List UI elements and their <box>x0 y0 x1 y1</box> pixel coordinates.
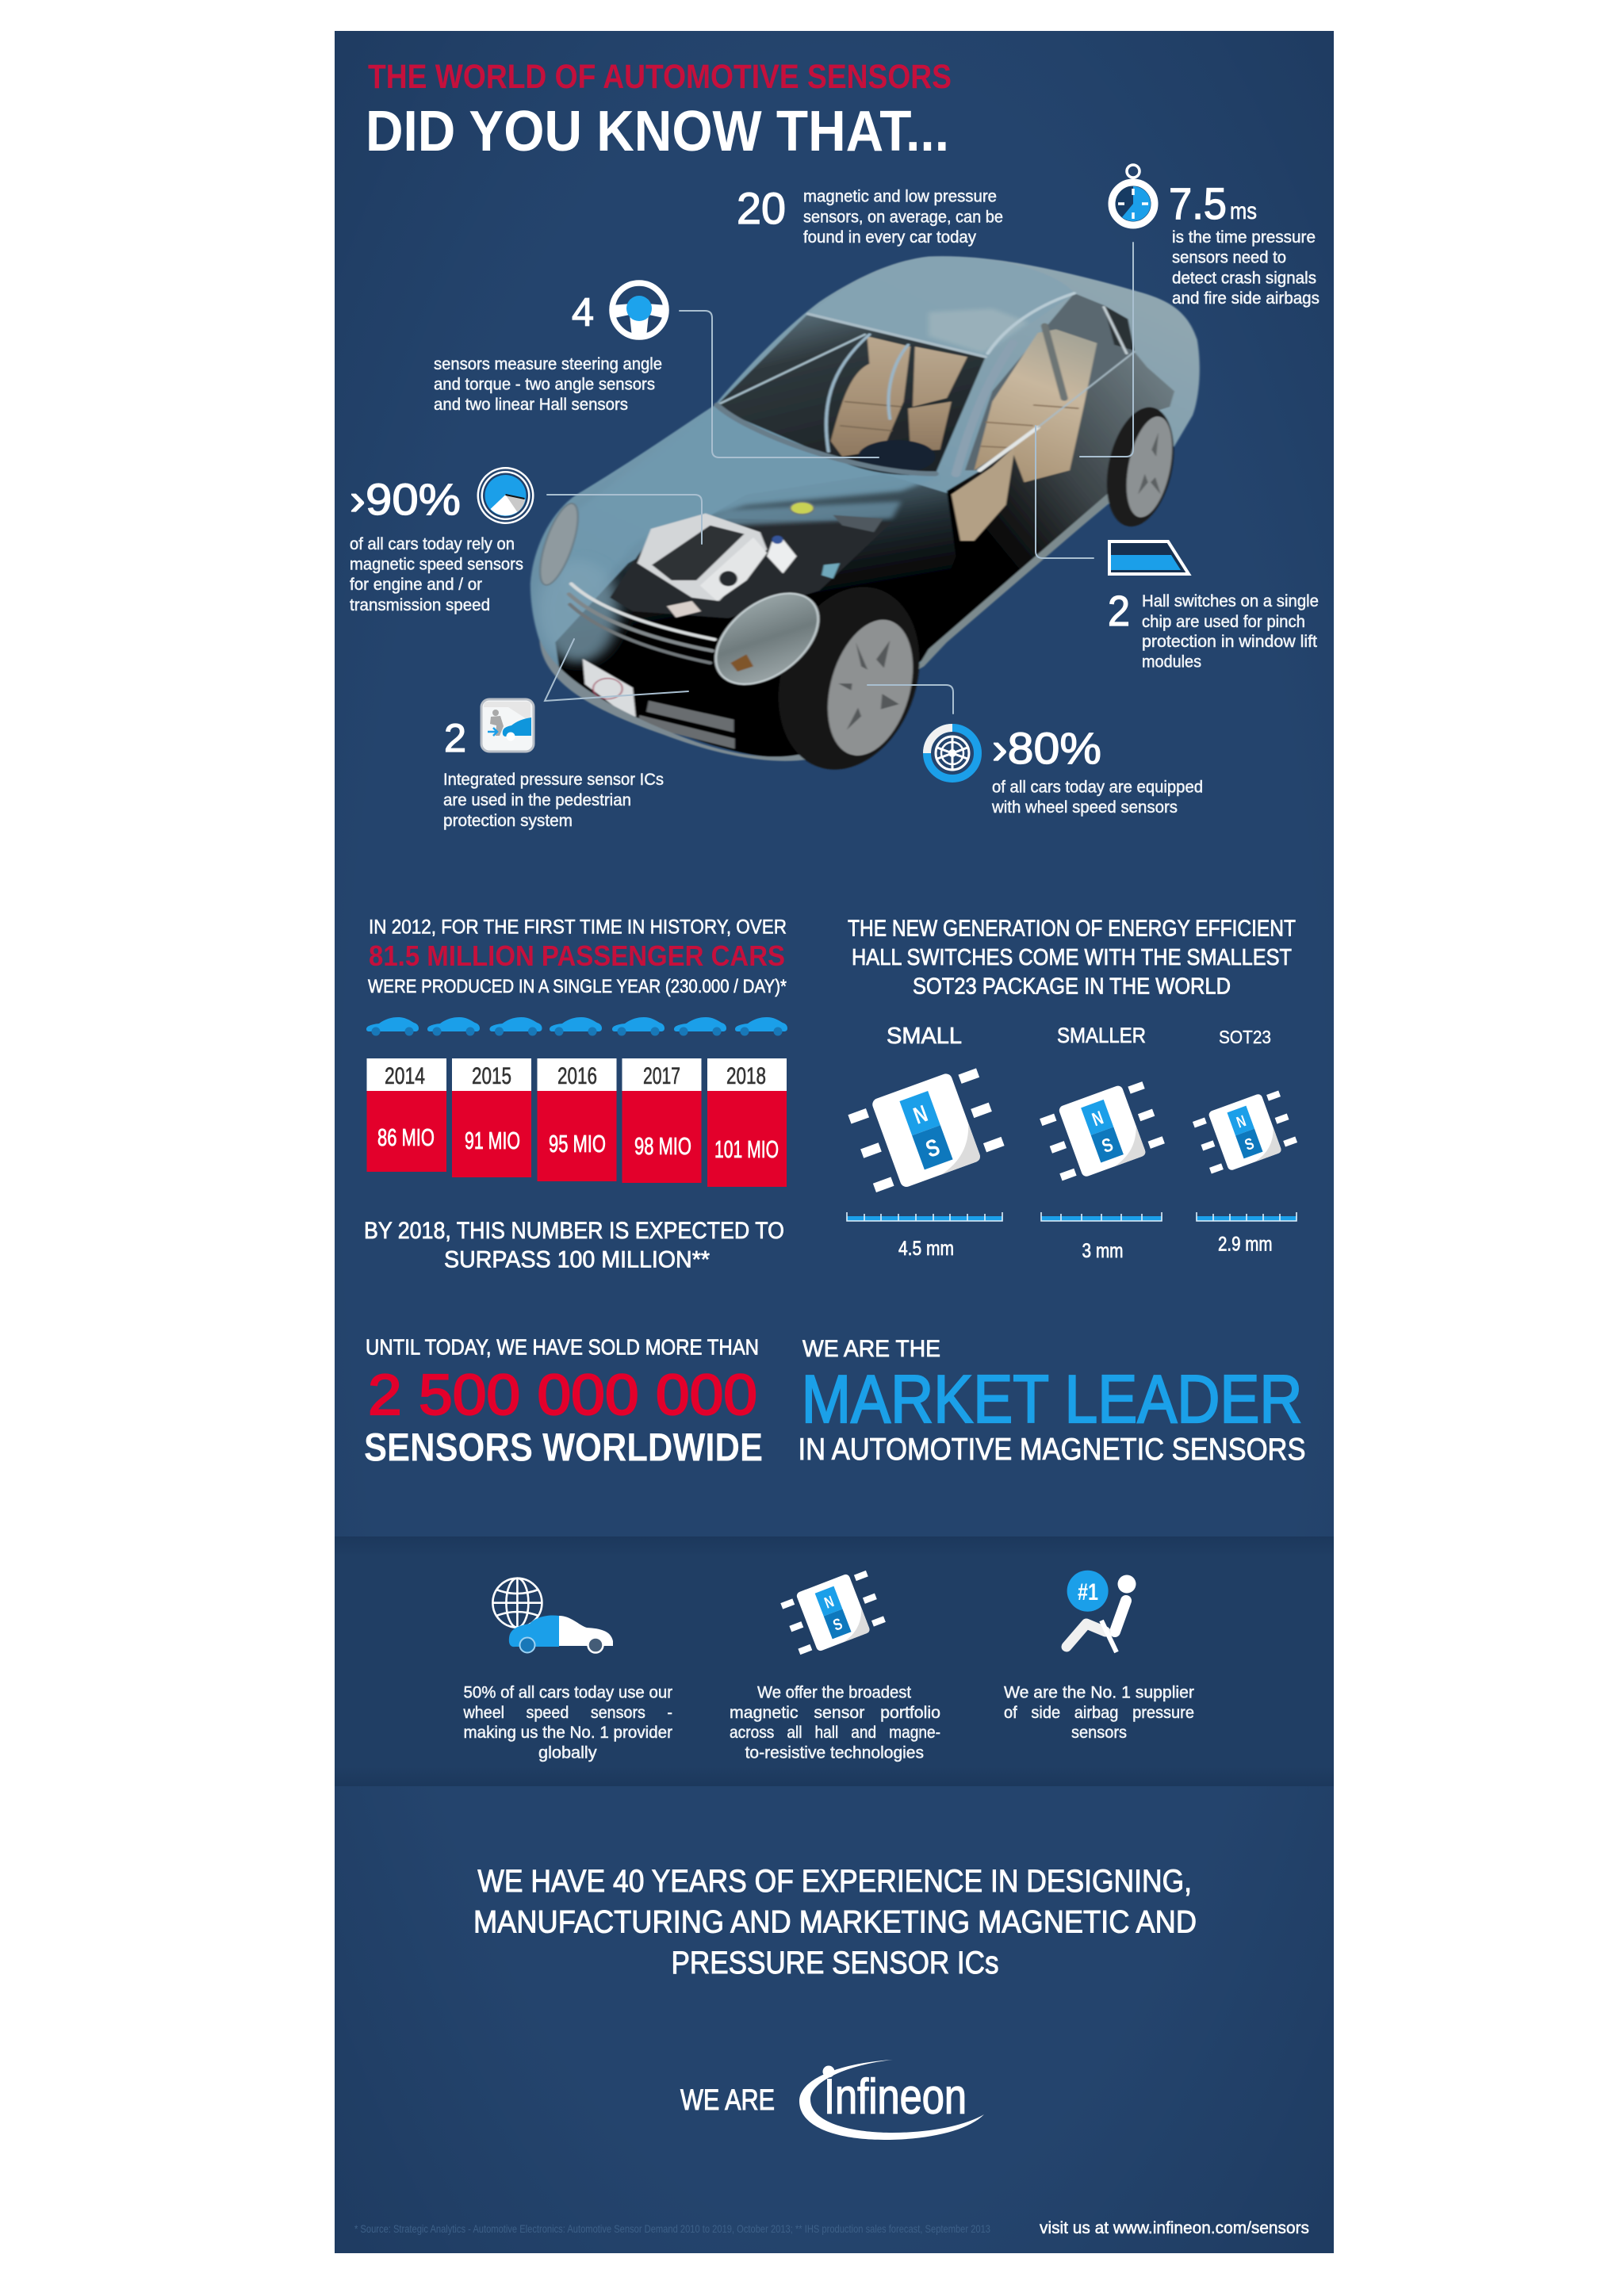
bar 2018: 2018 <box>726 1063 766 1089</box>
logo: Infineon: Infineon <box>824 2070 967 2125</box>
engine bay top haze <box>628 501 902 557</box>
production heading <box>368 916 787 997</box>
website link: visit us at www.infineon.com/sensors <box>1040 2218 1309 2237</box>
text: airbag supplier: of side airbag pressure <box>1004 1703 1194 1722</box>
size labels <box>887 1024 1271 1049</box>
engine block <box>638 513 767 601</box>
left headlight <box>532 501 586 587</box>
text: portfolio: We offer the broadest <box>757 1682 911 1701</box>
market leader statement: WE ARE THE <box>802 1336 940 1362</box>
icon: tire <box>927 728 978 779</box>
bumper left haze <box>537 560 619 663</box>
bar 2018: 101 MIO <box>714 1135 779 1163</box>
engine plate <box>652 526 745 580</box>
market leader statement <box>798 1336 1305 1467</box>
callout line: wheel speed <box>868 685 953 714</box>
fact: 4 steering sensors <box>434 290 662 414</box>
side interior <box>965 293 1134 470</box>
bar 2016 <box>538 1058 617 1181</box>
fact: 80 percent: of all cars today are equipped <box>992 778 1203 797</box>
footnote: * Source: Strategic Analytics - Automotive Electronics: Automotive Sensor Demand 2010 to 2019, October 2013; ** IHS production sales forecast, September 2013 <box>354 2222 990 2235</box>
text: airbag supplier <box>1004 1682 1194 1742</box>
front seat <box>831 336 910 457</box>
fact: 90 percent <box>350 474 523 614</box>
icon: airbag <box>1067 1571 1136 1652</box>
lower passenger seat <box>952 446 1015 541</box>
rear side window <box>1104 305 1134 350</box>
ruler: 3 mm: 3 mm <box>1082 1240 1123 1262</box>
side lower door dark region <box>915 352 1174 666</box>
chip: SOT23: S <box>1243 1135 1257 1154</box>
right headlight <box>695 580 839 698</box>
side sill <box>915 491 1119 672</box>
experience statement: PRESSURE SENSOR ICs <box>671 1946 999 1980</box>
fact: 2 pedestrian ICs: Integrated pressure sensor ICs <box>443 770 664 789</box>
front rim spokes <box>838 641 899 730</box>
bar 2016: 95 MIO <box>549 1130 606 1158</box>
fact: 2 hall switches: Hall switches on a single <box>1142 591 1319 610</box>
fact: 2 hall switches: protection in window lift <box>1142 632 1317 651</box>
fact: 80 percent <box>991 723 1203 817</box>
bar 2017: 98 MIO <box>634 1132 691 1160</box>
text: airbag supplier: sensors <box>1071 1723 1127 1742</box>
steering area <box>858 440 936 473</box>
market leader statement: IN AUTOMOTIVE MAGNETIC SENSORS <box>798 1433 1305 1467</box>
experience statement <box>473 1864 1197 1980</box>
hall switches heading: HALL SWITCHES COME WITH THE SMALLEST <box>852 945 1292 970</box>
roof haze glass <box>808 257 1074 357</box>
front rim <box>815 614 925 760</box>
ruler: 2.9 mm <box>1197 1212 1297 1256</box>
text: wheel speed leadership: wheel speed sensors - <box>463 1703 672 1722</box>
icon: airbag: #1 <box>1078 1579 1098 1605</box>
lower vents <box>638 701 735 749</box>
chip: small: S <box>922 1134 944 1163</box>
text: portfolio: magnetic sensor portfolio <box>730 1703 940 1722</box>
car body silhouette <box>530 256 1200 760</box>
fact: 90 percent: magnetic speed sensors <box>350 555 523 574</box>
fact: 90 percent: ›90% <box>350 474 461 524</box>
rear headrests faint <box>929 308 1028 354</box>
fact: 20 sensors <box>737 183 1003 247</box>
fact: 2 pedestrian ICs: 2 <box>444 716 466 760</box>
fact: 20 sensors: magnetic and low pressure <box>803 187 997 206</box>
chip: SOT23: N <box>1235 1112 1248 1132</box>
fact: 90 percent: of all cars today rely on <box>350 534 515 553</box>
production heading: IN 2012, FOR THE FIRST TIME IN HISTORY, OVER <box>369 916 787 939</box>
bar 2014: 86 MIO <box>377 1123 435 1151</box>
fact: 2 hall switches: 2 <box>1108 587 1130 635</box>
forecast text: BY 2018, THIS NUMBER IS EXPECTED TO <box>364 1218 784 1244</box>
fact: 2 hall switches: modules <box>1142 652 1201 671</box>
size labels: SMALLER <box>1057 1024 1146 1047</box>
bar 2016: 2016 <box>557 1063 597 1089</box>
middle seat <box>908 346 967 451</box>
bar 2017 <box>622 1058 701 1183</box>
fact: 2 pedestrian ICs: are used in the pedestrian <box>443 790 631 809</box>
fact: 4 steering sensors: and torque - two angle sensors <box>434 374 655 393</box>
bar 2015: 2015 <box>472 1063 511 1089</box>
experience statement: MANUFACTURING AND MARKETING MAGNETIC AND <box>473 1904 1197 1939</box>
front lower lip <box>539 639 813 761</box>
ruler: 3 mm <box>1041 1212 1162 1262</box>
text: wheel speed leadership: making us the No. 1 provider <box>463 1723 672 1742</box>
icon: chip: S <box>831 1615 845 1635</box>
rear rim <box>1119 415 1179 519</box>
page background panel <box>335 31 1334 2253</box>
fact: 90 percent: for engine and / or <box>350 575 482 594</box>
callout line: speed sensors <box>547 495 702 544</box>
fact: 7.5 ms: is the time pressure <box>1172 228 1316 247</box>
chip: smaller: N <box>1090 1108 1106 1131</box>
oil cap <box>719 571 737 586</box>
size labels: SOT23 <box>1219 1027 1271 1047</box>
rear tire <box>1097 404 1183 530</box>
fact: 4 steering sensors: 4 <box>572 290 594 335</box>
radiator detail <box>667 601 701 618</box>
rear seat stitching <box>981 405 1078 448</box>
fact: 20 sensors: found in every car today <box>803 228 976 247</box>
chip: smaller <box>1038 1077 1166 1185</box>
bar 2017: 2017 <box>643 1063 680 1089</box>
hood haze <box>537 408 938 663</box>
hall switches heading <box>848 916 1296 1000</box>
market leader statement: MARKET LEADER <box>802 1362 1303 1437</box>
bar 2018 <box>707 1058 787 1187</box>
callout line: 7.5 ms <box>1080 243 1133 457</box>
callout line: steering <box>680 311 879 457</box>
car illustration <box>530 256 1200 778</box>
chip: small: N <box>910 1100 931 1130</box>
icon row: cars <box>366 1017 787 1035</box>
fact: 20 sensors: 20 <box>737 183 786 233</box>
door frame strokes <box>717 293 1134 474</box>
chip: small <box>846 1063 1006 1198</box>
forecast text <box>364 1218 784 1273</box>
engine side cover <box>700 538 767 601</box>
callout line: window lift <box>1036 426 1094 558</box>
rear rim spokes <box>1138 433 1161 495</box>
fact: 80 percent: ›80% <box>992 723 1101 773</box>
ruler: 4.5 mm <box>847 1212 1002 1260</box>
fact: 7.5 ms: and fire side airbags <box>1172 289 1320 308</box>
bar 2015 <box>452 1058 531 1177</box>
icon: pedestrian protection <box>481 699 534 752</box>
forecast text: SURPASS 100 MILLION** <box>444 1246 710 1273</box>
front black bumper and fender <box>555 474 963 760</box>
sold sensors statement <box>364 1335 763 1469</box>
fact: 4 steering sensors: and two linear Hall sensors <box>434 395 628 414</box>
fact: 7.5 ms <box>1169 178 1320 308</box>
bar 2014: 2014 <box>385 1063 425 1089</box>
text: portfolio: to-resistive technologies <box>745 1743 924 1762</box>
text: airbag supplier: We are the No. 1 supplier <box>1004 1682 1194 1701</box>
fact: 80 percent: with wheel speed sensors <box>991 798 1178 817</box>
license plate <box>583 659 637 723</box>
chip: SOT23 <box>1191 1087 1299 1177</box>
washer cap <box>822 563 840 579</box>
bar chart: production by year <box>366 1058 787 1187</box>
hall switches heading: SOT23 PACKAGE IN THE WORLD <box>913 974 1231 1000</box>
fuse boxes <box>833 515 883 532</box>
fact: 7.5 ms: ms <box>1230 198 1257 224</box>
icon: chip <box>779 1567 887 1659</box>
fact: 7.5 ms: detect crash signals <box>1172 268 1316 287</box>
icon: globe and car <box>492 1578 613 1652</box>
front seat stitching <box>840 401 902 430</box>
icon: window lift <box>1109 541 1189 574</box>
logo: Infineon <box>799 2060 984 2140</box>
experience statement: WE HAVE 40 YEARS OF EXPERIENCE IN DESIGNING, <box>477 1864 1192 1899</box>
heading: did you know that: DID YOU KNOW THAT... <box>366 100 949 163</box>
text: wheel speed leadership <box>463 1682 672 1762</box>
engine bay <box>610 519 892 618</box>
fact: 4 steering sensors: sensors measure steering angle <box>434 354 662 373</box>
band: highlights panel background <box>335 1536 1334 1786</box>
fact: 2 pedestrian ICs <box>443 716 664 830</box>
title: the world of automotive sensors: THE WORLD OF AUTOMOTIVE SENSORS <box>368 58 952 96</box>
text: portfolio: across all hall and magne- <box>730 1723 940 1742</box>
reservoir <box>767 539 797 573</box>
size labels: SMALL <box>887 1024 962 1049</box>
windshield <box>717 314 986 475</box>
ruler: 4.5 mm: 4.5 mm <box>898 1238 954 1260</box>
fact: 2 hall switches: chip are used for pinch <box>1142 612 1305 631</box>
fact: 2 hall switches <box>1108 587 1319 671</box>
hall switches heading: THE NEW GENERATION OF ENERGY EFFICIENT <box>848 916 1296 942</box>
sold sensors statement: UNTIL TODAY, WE HAVE SOLD MORE THAN <box>366 1335 759 1360</box>
fact: 2 pedestrian ICs: protection system <box>443 811 573 830</box>
text: wheel speed leadership: 50% of all cars today use our <box>463 1682 672 1701</box>
yellow cap <box>791 502 814 515</box>
headlight lamp <box>730 654 753 672</box>
plate logo <box>593 679 622 699</box>
fact: 7.5 ms: sensors need to <box>1172 248 1286 267</box>
fact: 90 percent: transmission speed <box>350 595 490 614</box>
text: portfolio <box>730 1682 940 1762</box>
we are: WE ARE <box>680 2084 775 2116</box>
front tire <box>760 579 937 778</box>
fact: 20 sensors: sensors, on average, can be <box>803 207 1003 226</box>
callout line: pedestrian <box>545 639 688 701</box>
bar 2015: 91 MIO <box>465 1127 520 1154</box>
fact: 7.5 ms: 7.5 <box>1169 178 1227 228</box>
ruler: 2.9 mm: 2.9 mm <box>1218 1234 1272 1256</box>
rear seat <box>974 329 1097 482</box>
grille <box>569 584 714 663</box>
icon: stopwatch <box>1112 165 1155 225</box>
reservoir cap <box>772 536 783 544</box>
icon: steering wheel <box>612 283 666 337</box>
production heading: WERE PRODUCED IN A SINGLE YEAR (230.000 / DAY)* <box>368 976 787 997</box>
sold sensors statement: 2 500 000 000 <box>368 1364 757 1427</box>
text: wheel speed leadership: globally <box>538 1743 597 1762</box>
icon: speedometer <box>477 467 534 524</box>
sold sensors statement: SENSORS WORLDWIDE <box>364 1425 763 1469</box>
icon: chip: N <box>822 1593 837 1613</box>
bar 2014 <box>366 1058 446 1172</box>
chip: smaller: S <box>1099 1134 1116 1158</box>
production heading: 81.5 MILLION PASSENGER CARS <box>369 939 785 972</box>
